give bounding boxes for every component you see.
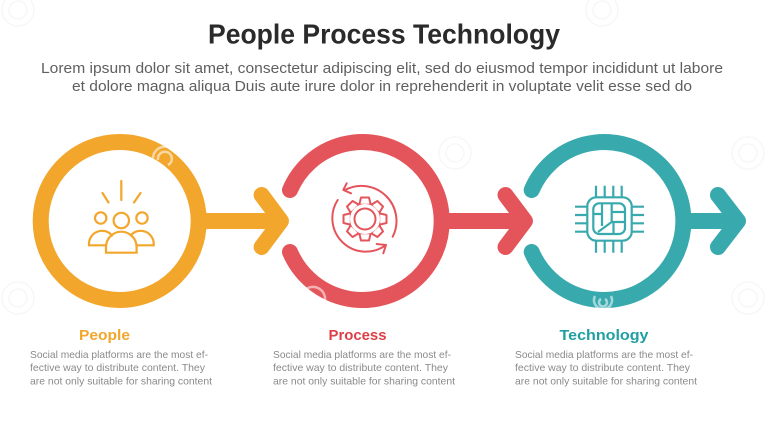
background watermark marks bbox=[2, 0, 764, 314]
title: People Process Technology bbox=[208, 18, 560, 50]
description: technology bbox=[515, 349, 697, 388]
arrow: technology output bbox=[686, 195, 738, 247]
description: people bbox=[30, 349, 212, 388]
description: process: Social media platforms are the most ef- bbox=[273, 349, 451, 361]
description: technology: are not only suitable for sharing content bbox=[515, 376, 697, 388]
intro text: Lorem ipsum dolor sit amet, consectetur adipiscing elit, sed do eiusmod tempor incididunt ut labore bbox=[41, 61, 723, 77]
intro text: et dolore magna aliqua Duis aute irure dolor in reprehenderit in voluptate velit esse sed do bbox=[72, 79, 692, 95]
description: process: fective way to distribute content. They bbox=[273, 362, 449, 374]
description: people: fective way to distribute content. They bbox=[30, 362, 206, 374]
description: technology: fective way to distribute content. They bbox=[515, 362, 691, 374]
description: people: Social media platforms are the most ef- bbox=[30, 349, 208, 361]
arrow: people to process bbox=[200, 195, 281, 247]
label: people: People bbox=[79, 328, 130, 344]
ring: technology bbox=[532, 142, 683, 300]
ring: process bbox=[290, 142, 442, 300]
intro text bbox=[41, 61, 723, 95]
label: process: Process bbox=[328, 328, 386, 344]
icon: process gear bbox=[332, 183, 396, 253]
icon: technology chip bbox=[575, 186, 644, 253]
icon: people bbox=[89, 181, 154, 253]
arrow: process to technology bbox=[445, 195, 525, 247]
watermark marks on rings bbox=[153, 147, 612, 309]
description: process bbox=[273, 349, 455, 388]
description: people: are not only suitable for sharing content bbox=[30, 376, 212, 388]
label: technology: Technology bbox=[560, 328, 648, 344]
ring: people bbox=[41, 142, 199, 300]
description: process: are not only suitable for sharing content bbox=[273, 376, 455, 388]
description: technology: Social media platforms are the most ef- bbox=[515, 349, 693, 361]
